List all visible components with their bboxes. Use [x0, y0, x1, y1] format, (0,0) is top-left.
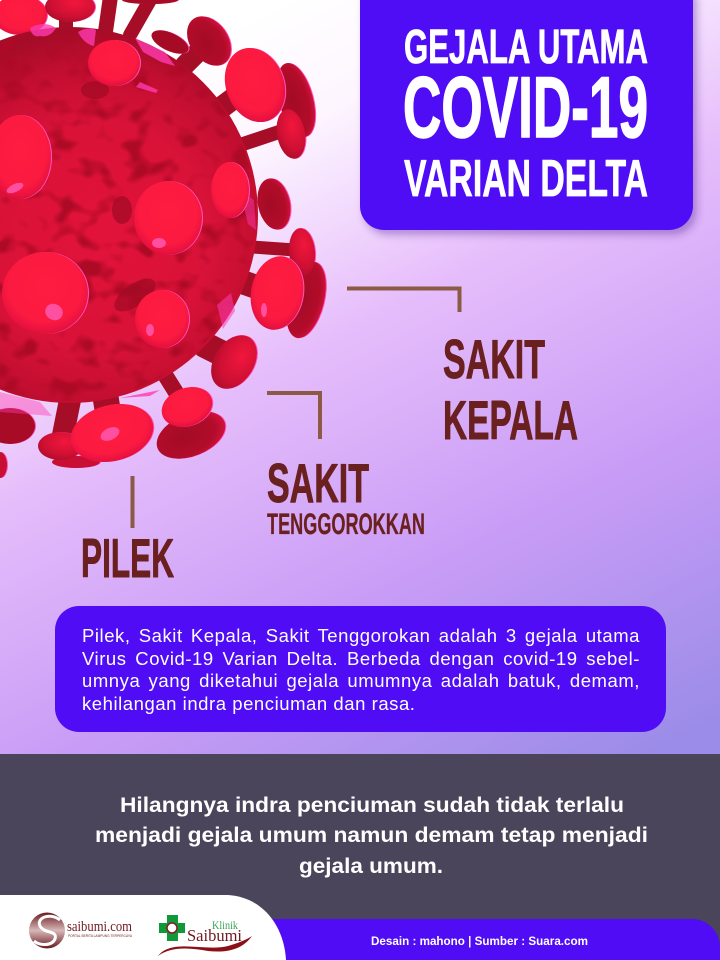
text block: description [82, 625, 640, 714]
note text [95, 794, 648, 878]
cross emblem [167, 923, 177, 933]
virus heads in front [0, 39, 309, 470]
virus dark patches [81, 81, 161, 318]
note background [0, 754, 720, 960]
logo sphere [29, 912, 65, 948]
label: sakit tenggorokkan [267, 452, 425, 541]
text block: description: Pilek, Sakit Kepala, Sakit Tenggorokan adalah 3 gejala utama [82, 625, 640, 646]
logo S mark [34, 916, 60, 945]
footer: logo panel [0, 895, 286, 960]
note text: menjadi gejala umum namun demam tetap menjadi [95, 824, 648, 847]
logo: saibumi.com [29, 912, 133, 948]
credit bar background [270, 919, 720, 960]
connector: sakit kepala [347, 288, 460, 312]
virus stems [62, 0, 295, 440]
note text: Hilangnya indra penciuman sudah tidak terlalu [120, 794, 624, 817]
label: sakit kepala [443, 328, 578, 451]
label: pilek: PILEK [81, 527, 174, 589]
panel: title [360, 0, 693, 230]
label: sakit tenggorokkan: SAKIT [267, 452, 369, 514]
credit text: Desain : mahono | Sumber : Suara.com [371, 934, 588, 948]
green cross [159, 915, 185, 941]
saibumi wordmark: Saibumi [187, 926, 242, 945]
note text: gejala umum. [299, 855, 443, 878]
text block: description: kehilangan indra penciuman dan rasa. [82, 693, 416, 714]
logo: klinik saibumi [158, 915, 252, 956]
klinik wordmark: Klinik [212, 918, 238, 932]
virus body texture [0, 29, 256, 401]
panel: bottom note [0, 754, 720, 960]
label: sakit kepala: SAKIT [443, 328, 545, 390]
swoosh [158, 936, 252, 956]
title text [403, 21, 648, 208]
virus heads behind the body [0, 0, 333, 478]
text block: description: Virus Covid-19 Varian Delta. Berbeda dengan covid-19 sebel- [82, 648, 640, 669]
logo wordmark: saibumi.com [67, 919, 132, 935]
panel: description background [55, 606, 666, 732]
text block: description: umnya yang diketahui gejala umumnya adalah batuk, demam, [82, 670, 640, 691]
connector: pilek [130, 476, 134, 528]
connector: sakit tenggorokan [267, 393, 320, 439]
label: sakit tenggorokkan: TENGGOROKKAN [267, 508, 425, 541]
title box [360, 0, 693, 230]
virus body [0, 27, 258, 403]
virus body highlights [0, 24, 256, 416]
illustration: red coronavirus [0, 0, 333, 478]
footer: credit bar [270, 919, 720, 960]
logo tagline: PORTAL BERITA LAMPUNG TERPERCAYA [68, 934, 133, 938]
label: sakit kepala: KEPALA [443, 389, 578, 451]
virus head glints [5, 181, 267, 444]
